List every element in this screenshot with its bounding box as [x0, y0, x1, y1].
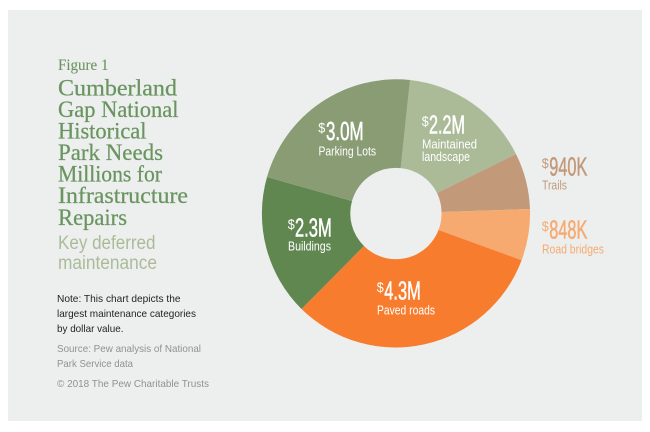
slice: parking lots: [267, 79, 410, 201]
label: trails: 940K: [549, 154, 587, 182]
label: paved roads: $: [377, 279, 384, 295]
label: trails: [542, 154, 587, 192]
title: Gap National: [58, 97, 179, 123]
label: buildings: $: [288, 216, 295, 232]
slice: maintained landscape: [401, 80, 516, 193]
label: buildings: Buildings: [288, 240, 331, 254]
label: maintained landscape: $: [422, 113, 429, 129]
label: trails: $: [542, 155, 549, 171]
note text: Note: This chart depicts the: [57, 293, 181, 305]
figure label: Figure 1: [58, 57, 108, 74]
title: Repairs: [58, 205, 127, 231]
label: road bridges: $: [542, 218, 549, 234]
title: Park Needs: [58, 140, 163, 166]
label: road bridges: 848K: [549, 216, 587, 244]
title: Cumberland: [58, 76, 177, 102]
label: road bridges: [542, 216, 604, 256]
copyright: © 2018 The Pew Charitable Trusts: [57, 378, 209, 390]
title: [58, 76, 188, 231]
note text: largest maintenance categories: [57, 308, 196, 320]
label: buildings: [288, 215, 332, 254]
label: paved roads: 4.3M: [384, 277, 421, 305]
title: Millions for: [58, 162, 162, 188]
label: road bridges: Road bridges: [542, 242, 604, 256]
slice: trails: [437, 154, 530, 212]
heading block: [58, 57, 188, 274]
slice: road bridges: [438, 209, 530, 260]
donut chart: [262, 79, 530, 347]
label: maintained landscape: Maintained: [422, 138, 477, 152]
label: maintained landscape: landscape: [422, 150, 470, 164]
source text: Source: Pew analysis of National: [57, 343, 201, 355]
label: maintained landscape: [422, 112, 477, 164]
label: buildings: 2.3M: [295, 215, 332, 243]
title: Historical: [58, 118, 147, 144]
label: parking lots: [318, 118, 376, 158]
label: maintained landscape: 2.2M: [429, 112, 465, 140]
label: trails: Trails: [542, 178, 567, 192]
slice: buildings: [262, 177, 364, 309]
label: parking lots: $: [318, 120, 325, 136]
label: parking lots: 3.0M: [326, 118, 364, 146]
subtitle: [58, 233, 157, 274]
subtitle: Key deferred: [58, 233, 156, 254]
title: Infrastructure: [58, 183, 188, 209]
slice: paved roads: [302, 230, 522, 347]
source text: [57, 343, 201, 370]
label: paved roads: [377, 277, 435, 318]
label: paved roads: Paved roads: [377, 304, 435, 318]
label: parking lots: Parking Lots: [318, 144, 376, 158]
note text: by dollar value.: [57, 323, 124, 335]
subtitle: maintenance: [58, 253, 157, 274]
source text: Park Service data: [57, 358, 133, 370]
note text: [57, 293, 196, 335]
